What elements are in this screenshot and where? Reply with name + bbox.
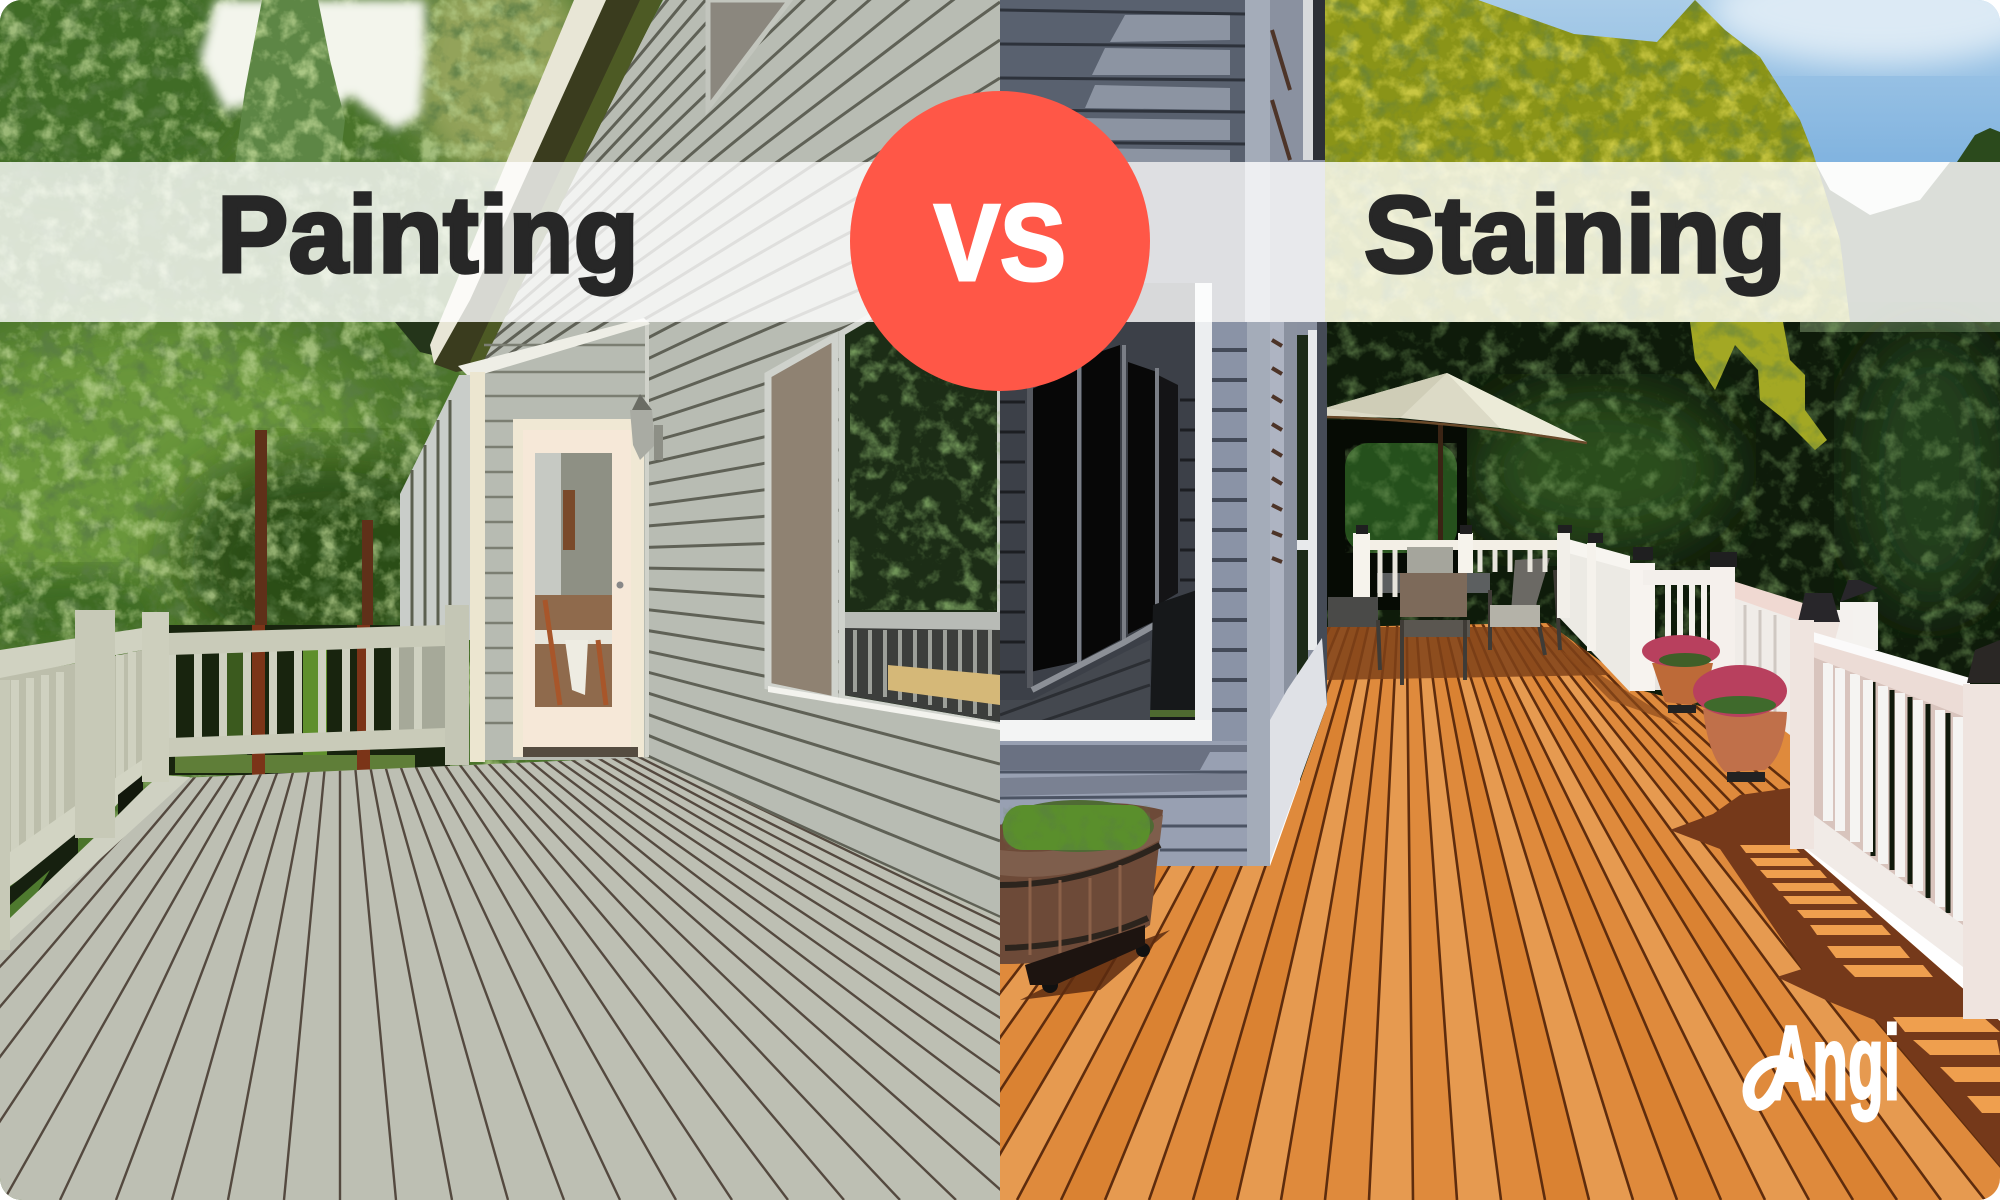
cream post (470, 372, 485, 762)
side railing far (1557, 525, 1878, 735)
flower pot small (1642, 635, 1720, 713)
deck boards: stained cedar (1000, 623, 2000, 1200)
logo: Angi: Angi (1770, 1005, 1900, 1122)
lower siding (1000, 741, 1247, 868)
banner: translucent band (0, 162, 2000, 322)
roof fascia and soffit (430, 0, 662, 372)
wall: gray siding (484, 0, 1000, 918)
large window (764, 316, 1000, 730)
heading: Staining: Staining (1364, 174, 1786, 296)
yellow branch (1690, 322, 1827, 450)
VS badge (850, 91, 1150, 391)
yellow-green tree (1300, 0, 1860, 330)
front wall siding (1000, 0, 1247, 742)
trees background (0, 0, 1000, 1200)
panel: staining photo (1000, 0, 2000, 1200)
screened porch (400, 375, 470, 640)
heading: Painting: Painting (217, 174, 639, 296)
clouds (1710, 0, 2000, 65)
dark forest background (1300, 128, 2000, 822)
door (513, 419, 644, 757)
deck boards: painted gray (0, 757, 1000, 1200)
railing: painted white-gray (0, 605, 469, 950)
corner trim (1245, 0, 1270, 866)
VS badge: VS (934, 182, 1066, 304)
wooden barrel planter (1000, 800, 1170, 1010)
wall lamp (630, 394, 663, 460)
gable trim (458, 318, 650, 378)
deck shadows (1327, 627, 2000, 1166)
logo: Angi (1749, 1005, 1900, 1122)
flower pot large (1693, 665, 1787, 782)
back railing (1353, 525, 1559, 597)
dining set (1328, 558, 1560, 685)
sky (1478, 0, 2000, 162)
umbrella (1327, 373, 1588, 540)
front railing (1790, 620, 2000, 1019)
behind railing foliage (160, 625, 450, 775)
upper window (708, 0, 790, 108)
hedge (1345, 443, 1457, 553)
porch front wall (484, 320, 647, 760)
side wall with windows (1268, 0, 1327, 862)
panel: painting photo (0, 0, 1000, 1200)
big window (1000, 283, 1212, 741)
